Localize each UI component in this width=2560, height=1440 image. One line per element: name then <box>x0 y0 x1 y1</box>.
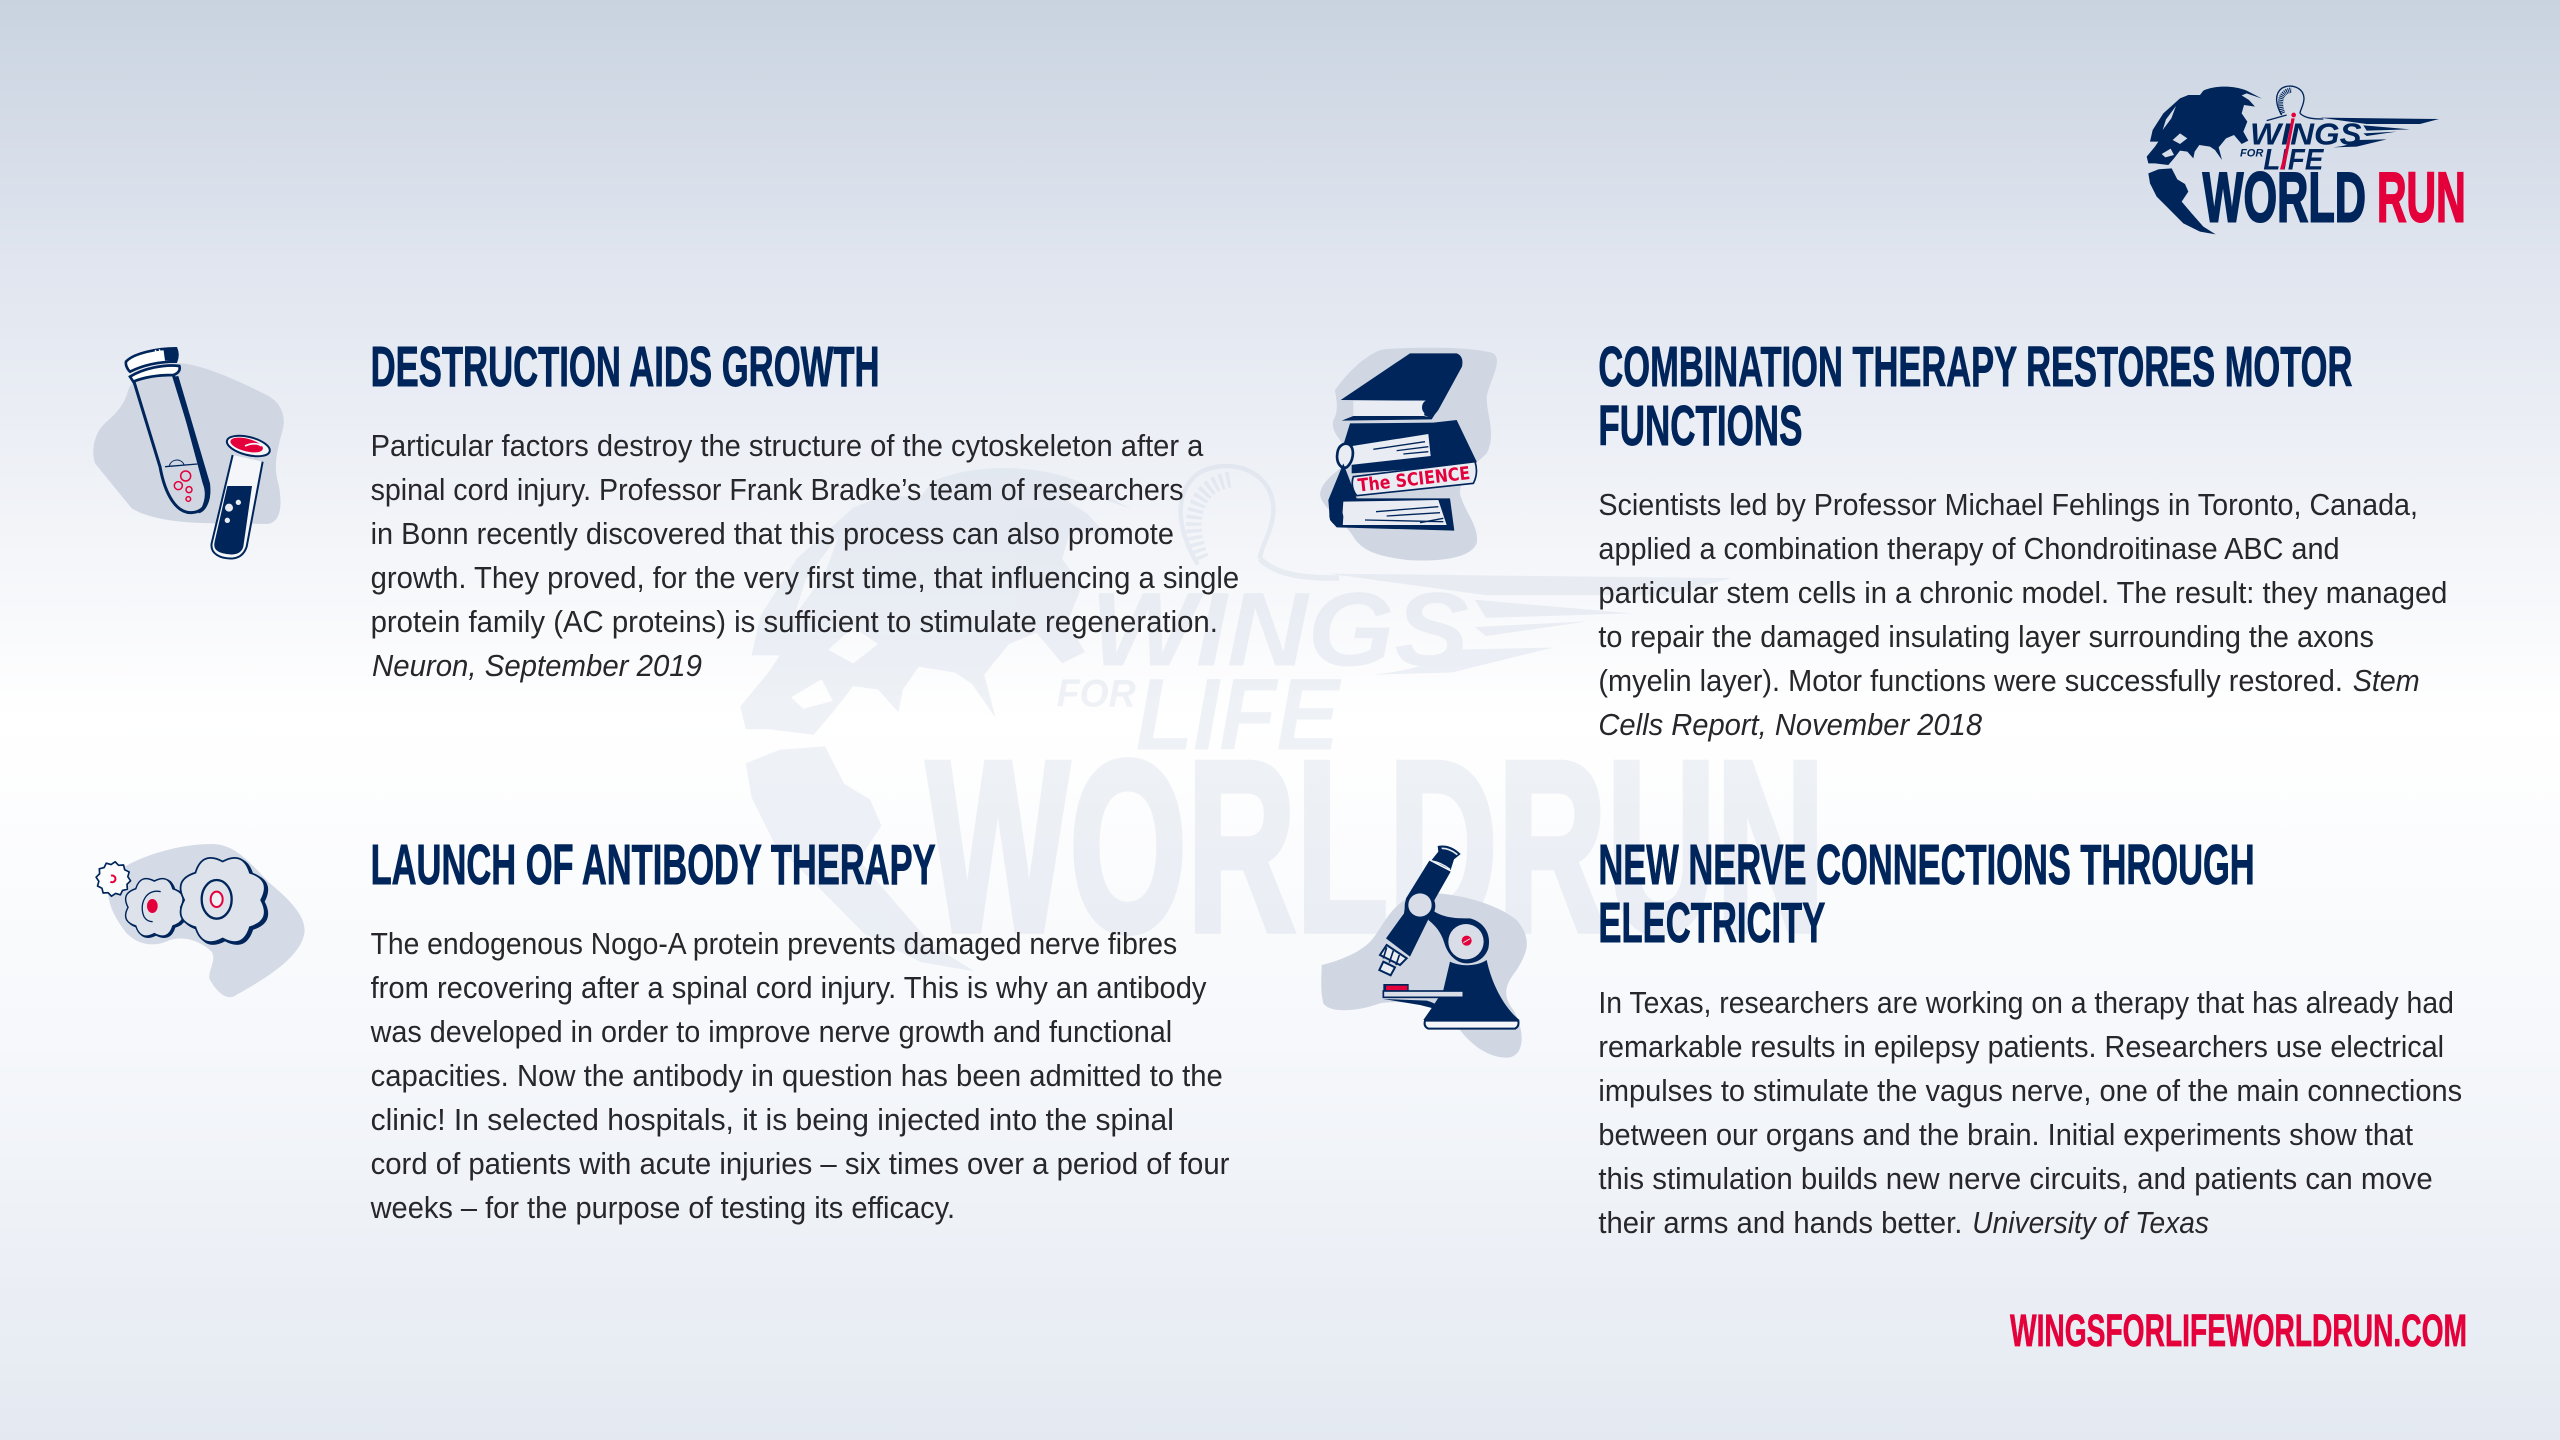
logo wordmark: WINGS <box>2250 118 2362 152</box>
tiny gear <box>94 860 132 898</box>
body text <box>1598 986 2462 1240</box>
watermark logo <box>740 466 1825 982</box>
book title: The SCIENCE <box>1357 463 1471 497</box>
heading: ELECTRICITY <box>1598 891 1825 955</box>
globe <box>2147 87 2262 234</box>
body text: The endogenous Nogo-A protein prevents damaged nerve fibres <box>371 927 1177 961</box>
body text: clinic! In selected hospitals, it is being injected into the spinal <box>371 1103 1174 1137</box>
panel: new nerve connections <box>1321 833 2462 1240</box>
body text: Stem <box>2353 664 2420 698</box>
logo wordmark: LIFE <box>2263 143 2324 176</box>
body text: in Bonn recently discovered that this process can also promote <box>371 517 1174 551</box>
body text: growth. They proved, for the very first time, that influencing a single <box>371 561 1239 595</box>
body text: from recovering after a spinal cord injury. This is why an antibody <box>371 971 1207 1005</box>
body text: remarkable results in epilepsy patients. Researchers use electrical <box>1598 1030 2444 1064</box>
panel: destruction aids growth <box>93 335 1239 683</box>
body text: Cells Report, November 2018 <box>1598 708 1982 742</box>
logo: Wings for Life World Run <box>2147 86 2466 237</box>
watermark logo: WINGS <box>1090 572 1469 689</box>
icon: test tubes <box>93 348 284 558</box>
heading: DESTRUCTION AIDS GROWTH <box>371 335 880 399</box>
body text: weeks – for the purpose of testing its efficacy. <box>370 1191 955 1225</box>
body text: In Texas, researchers are working on a therapy that has already had <box>1598 986 2454 1020</box>
body text: University of Texas <box>1972 1206 2209 1240</box>
body text: capacities. Now the antibody in question has been admitted to the <box>371 1059 1223 1093</box>
logo wordmark: WORLD <box>2203 158 2366 237</box>
logo wordmark: RUN <box>2377 158 2466 237</box>
body text: spinal cord injury. Professor Frank Bradke’s team of researchers <box>371 473 1184 507</box>
panel: combination therapy <box>1320 335 2447 742</box>
large gear <box>181 858 267 944</box>
body text: protein family (AC proteins) is sufficient to stimulate regeneration. <box>371 605 1218 639</box>
body text <box>371 429 1239 683</box>
icon: microscope <box>1321 845 1527 1058</box>
heading: FUNCTIONS <box>1598 394 1802 458</box>
winged figure <box>2267 86 2323 121</box>
watermark logo: WORLDRUN <box>927 712 1825 982</box>
icon: stack of books <box>1320 348 1497 561</box>
body text <box>1598 488 2447 742</box>
body text: Particular factors destroy the structure of the cytoskeleton after a <box>371 429 1203 463</box>
icon: gears <box>94 844 305 997</box>
red spinal cord <box>2280 113 2296 169</box>
body text: applied a combination therapy of Chondroitinase ABC and <box>1598 532 2340 566</box>
middle gear <box>126 879 185 937</box>
wing feathers <box>2320 118 2439 147</box>
body text: was developed in order to improve nerve growth and functional <box>370 1015 1172 1049</box>
heading <box>1598 833 2255 955</box>
body text: particular stem cells in a chronic model. The result: they managed <box>1598 576 2447 610</box>
watermark logo: LIFE <box>1136 657 1342 772</box>
body text: their arms and hands better. <box>1598 1206 1962 1240</box>
body text: this stimulation builds new nerve circuits, and patients can move <box>1598 1162 2433 1196</box>
body text: (myelin layer). Motor functions were successfully restored. <box>1598 664 2343 698</box>
logo wordmark <box>2203 118 2466 237</box>
heading <box>1598 335 2352 458</box>
body text: impulses to stimulate the vagus nerve, one of the main connections <box>1598 1074 2462 1108</box>
body text: between our organs and the brain. Initial experiments show that <box>1598 1118 2414 1152</box>
panel: launch of antibody therapy <box>94 833 1229 1225</box>
body text: to repair the damaged insulating layer surrounding the axons <box>1598 620 2374 654</box>
body text <box>370 927 1229 1225</box>
body text: cord of patients with acute injuries – six times over a period of four <box>371 1147 1229 1181</box>
body text: Neuron, September 2019 <box>372 649 702 683</box>
body text: Scientists led by Professor Michael Fehlings in Toronto, Canada, <box>1598 488 2418 522</box>
watermark logo: FOR <box>1057 672 1136 716</box>
heading: LAUNCH OF ANTIBODY THERAPY <box>371 833 936 897</box>
logo wordmark: FOR <box>2240 148 2264 160</box>
